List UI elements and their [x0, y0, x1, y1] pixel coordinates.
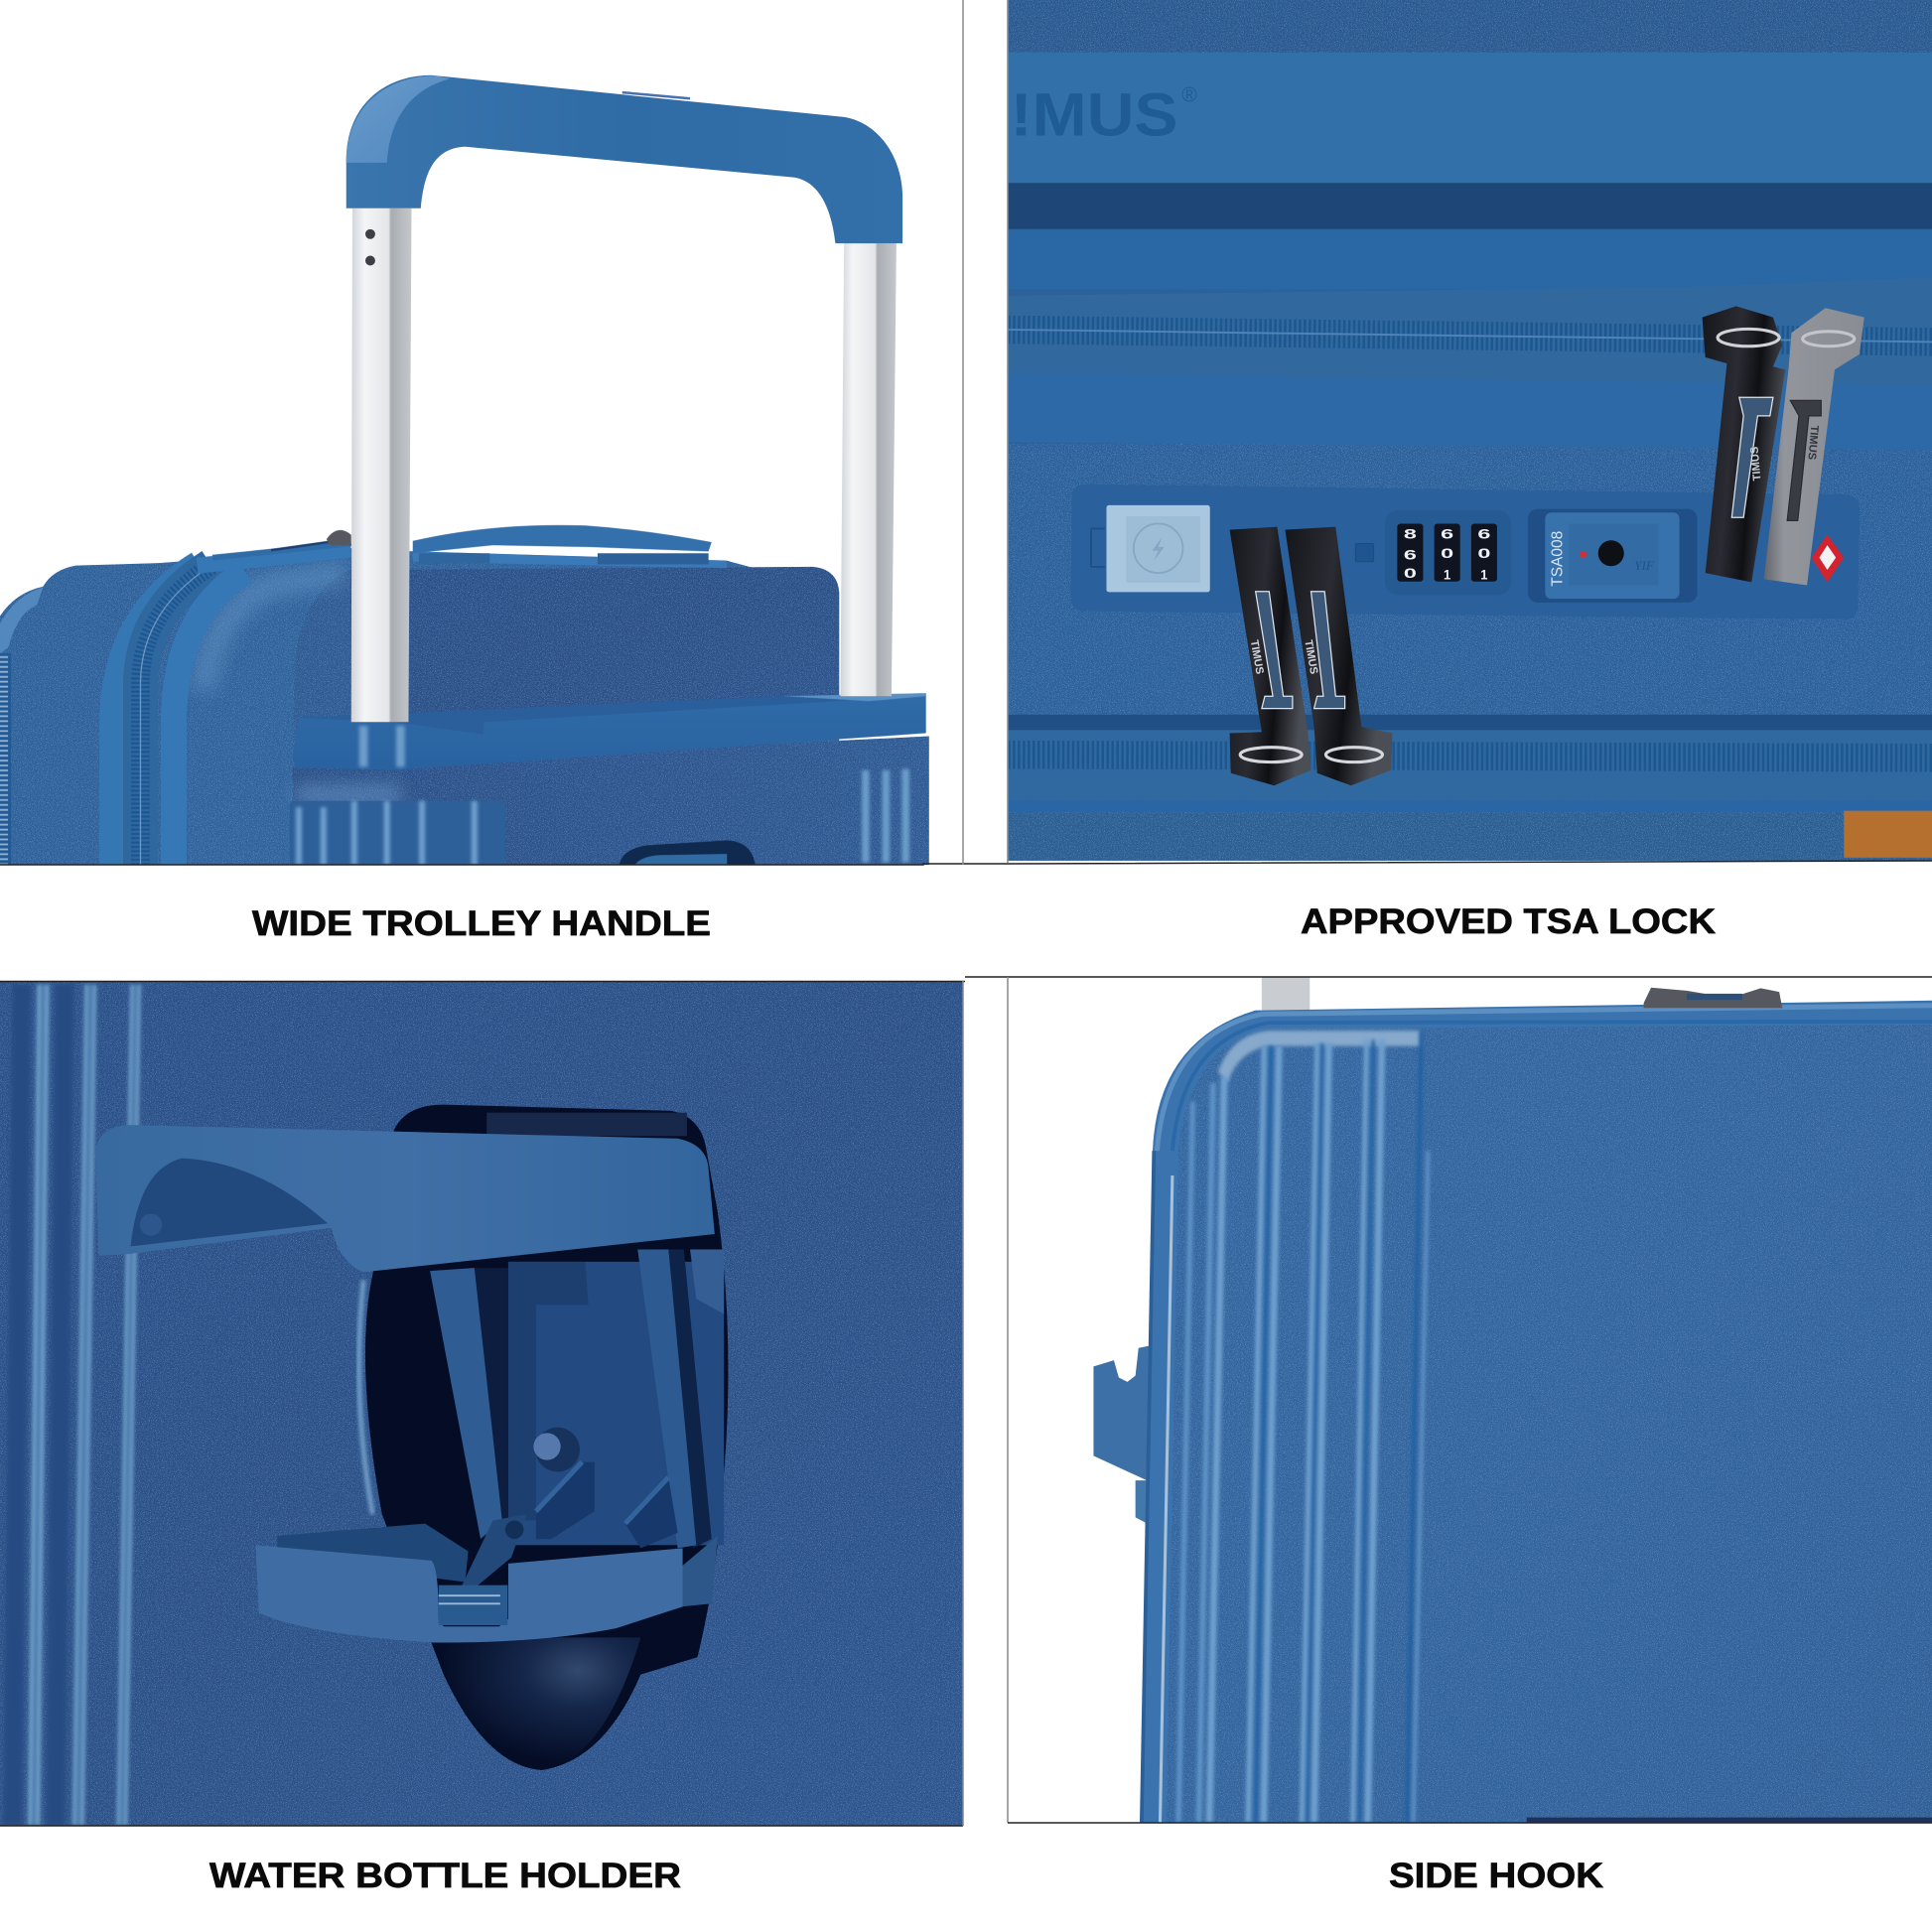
heading: wide trolley handle: WIDE TROLLEY HANDLE [252, 904, 711, 943]
zipper pull [327, 530, 351, 545]
upper ridge [1008, 229, 1932, 290]
combination dials [1385, 510, 1511, 595]
vertical ribs [12, 985, 136, 1826]
zipper pulls lower: TIMUS [1248, 639, 1266, 675]
indicator light [1355, 543, 1374, 562]
combination dials: 6 [1404, 548, 1417, 563]
dark groove [1008, 183, 1932, 229]
logo band [1008, 53, 1932, 183]
zipper pulls upper [1703, 306, 1864, 586]
combination dials: 8 [1404, 527, 1417, 542]
combination dials: 6 [1477, 527, 1490, 542]
combination dials: 0 [1404, 567, 1417, 582]
dark recess [365, 1105, 728, 1770]
far left zipper [0, 587, 43, 865]
fold-down cup ring [256, 1524, 718, 1642]
zipper pulls [1644, 988, 1782, 1008]
zipper pulls upper: TIMUS [1805, 425, 1820, 461]
combination dials: 0 [1477, 547, 1490, 562]
panel: water bottle holder [0, 982, 963, 1826]
top edge trim and zipper [1142, 1006, 1932, 1823]
leather patch [1844, 811, 1932, 858]
TSA key lock [1528, 509, 1698, 603]
top rib highlight [1218, 1031, 1421, 1083]
lower ridge [1008, 374, 1932, 450]
fold-down cup handle [95, 1113, 715, 1272]
lock panel [1070, 484, 1860, 620]
combination dials: 6 [1441, 527, 1453, 542]
zipper pulls lower [1230, 527, 1392, 785]
panel: wide trolley handle [0, 75, 929, 865]
hook [1093, 1345, 1151, 1525]
inner mechanism [430, 1249, 724, 1588]
panel: approved TSA lock [1008, 0, 1932, 861]
handle grip [346, 75, 902, 243]
logo band: !MUS [1011, 81, 1177, 149]
recess bowl [444, 1637, 640, 1770]
TSA red diamond logo [1811, 535, 1844, 582]
suitcase body [0, 548, 929, 865]
combination dials: 1 [1444, 567, 1451, 582]
shell base [1008, 0, 1932, 861]
TSA key lock: YIF [1634, 558, 1655, 573]
bottom shadow edge [1527, 1818, 1932, 1823]
zipper gasket [112, 541, 351, 865]
shell surface [0, 982, 963, 1826]
zipper pulls lower: TIMUS [1302, 639, 1319, 675]
telescopic pole left [351, 208, 412, 722]
telescopic pole right [840, 243, 897, 696]
heading: approved TSA lock: APPROVED TSA LOCK [1301, 902, 1716, 941]
wireless charging cover [1091, 505, 1210, 592]
pole behind [1262, 977, 1310, 1011]
shell highlights [204, 573, 400, 795]
TSA key lock: TSA008 [1550, 531, 1567, 587]
upper zipper [1008, 277, 1932, 385]
combination dials: 0 [1441, 547, 1453, 562]
corner ribs [1178, 1031, 1428, 1823]
bottom ridge and zipper [1008, 715, 1932, 812]
ribs on body [290, 768, 905, 865]
zipper pulls upper: TIMUS [1749, 446, 1763, 482]
suitcase body [1141, 1001, 1932, 1823]
base tray [293, 693, 926, 770]
heading: side hook: SIDE HOOK [1389, 1857, 1603, 1895]
rim highlight [359, 1280, 372, 1514]
combination dials: 1 [1480, 567, 1488, 582]
logo band: ® [1181, 83, 1197, 106]
panel: side hook [1093, 977, 1932, 1823]
carry handle [413, 525, 727, 568]
shell bands [1008, 0, 1932, 861]
heading: water bottle holder: WATER BOTTLE HOLDER [209, 1857, 681, 1895]
